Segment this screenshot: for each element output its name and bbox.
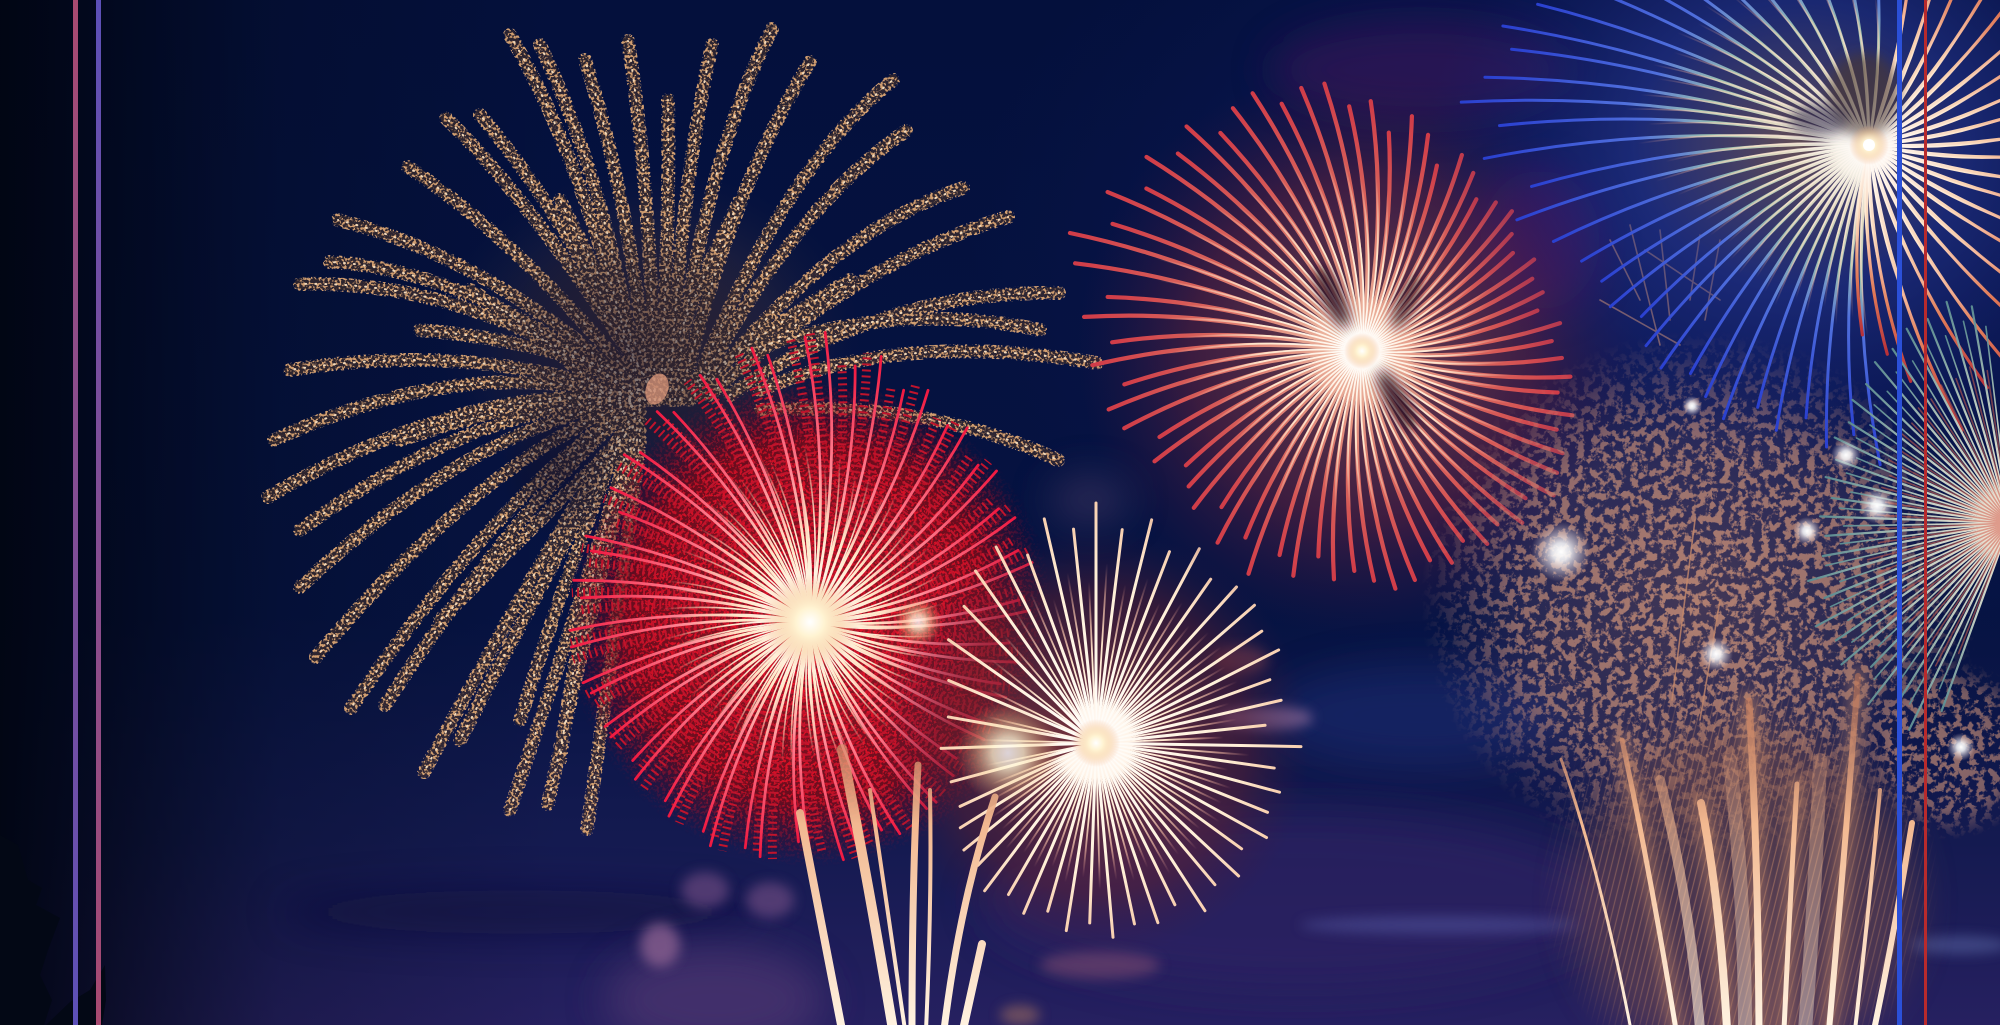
copper fountain bbox=[1547, 662, 1936, 1025]
vertical line: left violet to magenta bbox=[96, 0, 101, 1025]
firework: blue and orange burst bbox=[1429, 0, 2000, 465]
bright star sparks bbox=[1531, 396, 1975, 761]
firework: white burst bbox=[881, 503, 1311, 958]
vertical line: left magenta to violet bbox=[73, 0, 78, 1025]
bright spark near red burst bbox=[894, 598, 942, 646]
firework: copper dust burst bbox=[1420, 225, 2000, 870]
firework: gold palm burst bbox=[268, 29, 1097, 829]
vertical line: right red bbox=[1924, 0, 1927, 1025]
tree silhouette bbox=[0, 835, 106, 1025]
white fountain bbox=[800, 749, 995, 1025]
firework: coral swirl burst bbox=[1070, 66, 1647, 636]
vertical line: right blue bbox=[1897, 0, 1902, 1025]
clouds bbox=[280, 476, 2000, 1025]
firework: red and white burst bbox=[558, 320, 1055, 871]
firework: right teal burst bbox=[1808, 302, 2000, 730]
